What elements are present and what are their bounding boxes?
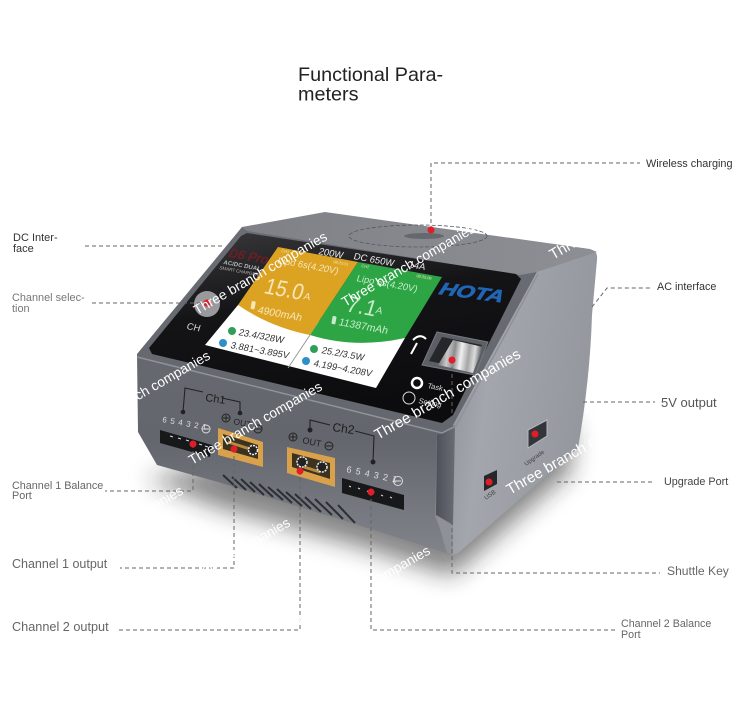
channel 1 stats: 23.4/328W [237,327,285,346]
label: DC interface: DC Inter- [13,232,58,244]
channel tags: 08:35:06 [416,273,433,281]
leader lines [85,163,660,630]
watermarks: Three branch companies [339,221,478,310]
channel 1 readout [250,255,340,324]
channel 2 readout [331,273,419,337]
Ch2 out label: OUT [302,435,323,449]
model subtitle: SMART CHARGER [219,265,260,277]
model name: D6 Pro [227,246,271,267]
body: side face [452,250,597,555]
Ch1 out label [222,414,262,433]
lower chamfer [436,515,453,555]
power specs: 200W [317,246,345,261]
watermarks: Three branch companies [294,543,433,632]
label: upgrade port: Upgrade Port [664,476,728,488]
label: channel 2 balance port: Channel 2 Balance [621,618,711,630]
brand logo: HOTA [437,279,507,306]
setting button [403,392,443,409]
screen: yellow channel [238,247,358,335]
label: channel selection: tion [12,303,30,315]
power specs [317,246,428,273]
title: Functional Para- [298,64,443,86]
USB port [484,470,497,502]
Ch2 XT connector [287,447,335,487]
label: channel 1 balance port: Port [12,490,32,502]
watermarks: Three branch companies [74,348,213,437]
task button: Task [426,381,444,393]
label: channel 1 balance port: Channel 1 Balance [12,480,103,492]
rotate icon [411,336,426,354]
channel 1 readout: 4900mAh [256,305,304,324]
Ch1 balance port [160,430,212,457]
shuttle key roller [438,340,483,373]
label: wireless charging: Wireless charging [646,158,733,170]
Ch1 bracket [183,388,240,413]
Ch2 balance port [342,478,404,510]
channel 2 stats [302,345,374,380]
red marker dots [190,226,538,496]
task button [412,378,444,393]
channel 1 readout: A [302,291,312,303]
watermarks [47,166,699,632]
channel 1 stats: 3.881~3.895V [229,340,291,362]
wireless logo [404,233,444,239]
label: AC interface: AC interface [657,281,716,293]
shuttle key housing [422,332,488,375]
label: channel selection: Channel selec- [12,292,85,304]
watermarks: Three branch companies [154,515,293,604]
charger device [137,212,597,555]
model subtitle: AC/DC DUAL [222,260,262,273]
Ch2 label: Ch2 [332,420,356,437]
channel 2 stats: 25.2/3.5W [320,345,366,364]
channel tags: CH2 [361,263,370,269]
title: meters [298,84,359,106]
label: DC interface: face [13,243,34,255]
channel 2 readout: 11387mAh [337,317,390,337]
screen divider [288,335,310,368]
Upgrade port [524,420,547,468]
wireless charging pad [349,225,487,247]
channel 1 stats [219,327,291,362]
channel 1 readout: Lipo 6s(4.20V) [276,255,340,277]
setting button: Setting [417,396,443,409]
channel tags: CH1 [281,248,291,255]
watermarks: Three branch companies [191,229,330,318]
channel 2 readout: 7.1 [343,291,381,321]
watermarks: Three branch companies [47,483,186,572]
body: front face [137,227,537,555]
Ch1 out label: OUT [233,416,252,430]
label: channel 1 output: Channel 1 output [12,557,108,571]
Ch1 label: Ch1 [205,392,226,407]
watermarks: Three branch companies [372,346,524,443]
power specs: DC 650W [352,251,396,269]
channel knob [194,291,220,317]
watermarks: Three branch companies [546,166,699,263]
Upgrade port: Upgrade [524,449,547,468]
watermarks: Three branch companies [504,401,656,498]
USB port: USB [484,490,497,502]
device shadow [145,420,572,576]
Ch2 balance digits: 6 5 4 3 2 1 [346,464,399,485]
side pillar [436,425,455,525]
channel tags [281,248,433,281]
vent slots [223,475,355,523]
panel lip [137,274,538,433]
body: top surface [242,212,597,275]
channel 2 stats: 4.199~4.208V [312,358,374,380]
screen: green channel [310,262,442,343]
Ch2 out label [289,433,333,450]
model subtitle [219,260,262,277]
channel 1 readout: 15.0 [261,273,308,305]
screen: white lower area [205,305,405,388]
CH label: CH [185,321,202,334]
channel tags: 08:25:51 [333,259,350,267]
power specs: 14A [407,259,428,273]
bracket end dots [181,410,376,464]
front panel [149,233,521,423]
Ch1 XT connector [218,428,263,467]
Ch1 balance digits: 6 5 4 3 2 1 [162,415,208,432]
label: channel 2 balance port: Port [621,629,641,641]
label: 5V output: 5V output [661,395,717,410]
label: shuttle key: Shuttle Key [667,564,730,578]
Ch2 bracket [310,420,374,462]
channel 2 readout: A [374,305,384,317]
watermarks: Three branch companies [186,379,325,468]
channel 2 readout: Lipo 6s(4.20V) [355,273,419,295]
shuttle key inner [429,337,482,370]
label: channel 2 output: Channel 2 output [12,620,109,634]
